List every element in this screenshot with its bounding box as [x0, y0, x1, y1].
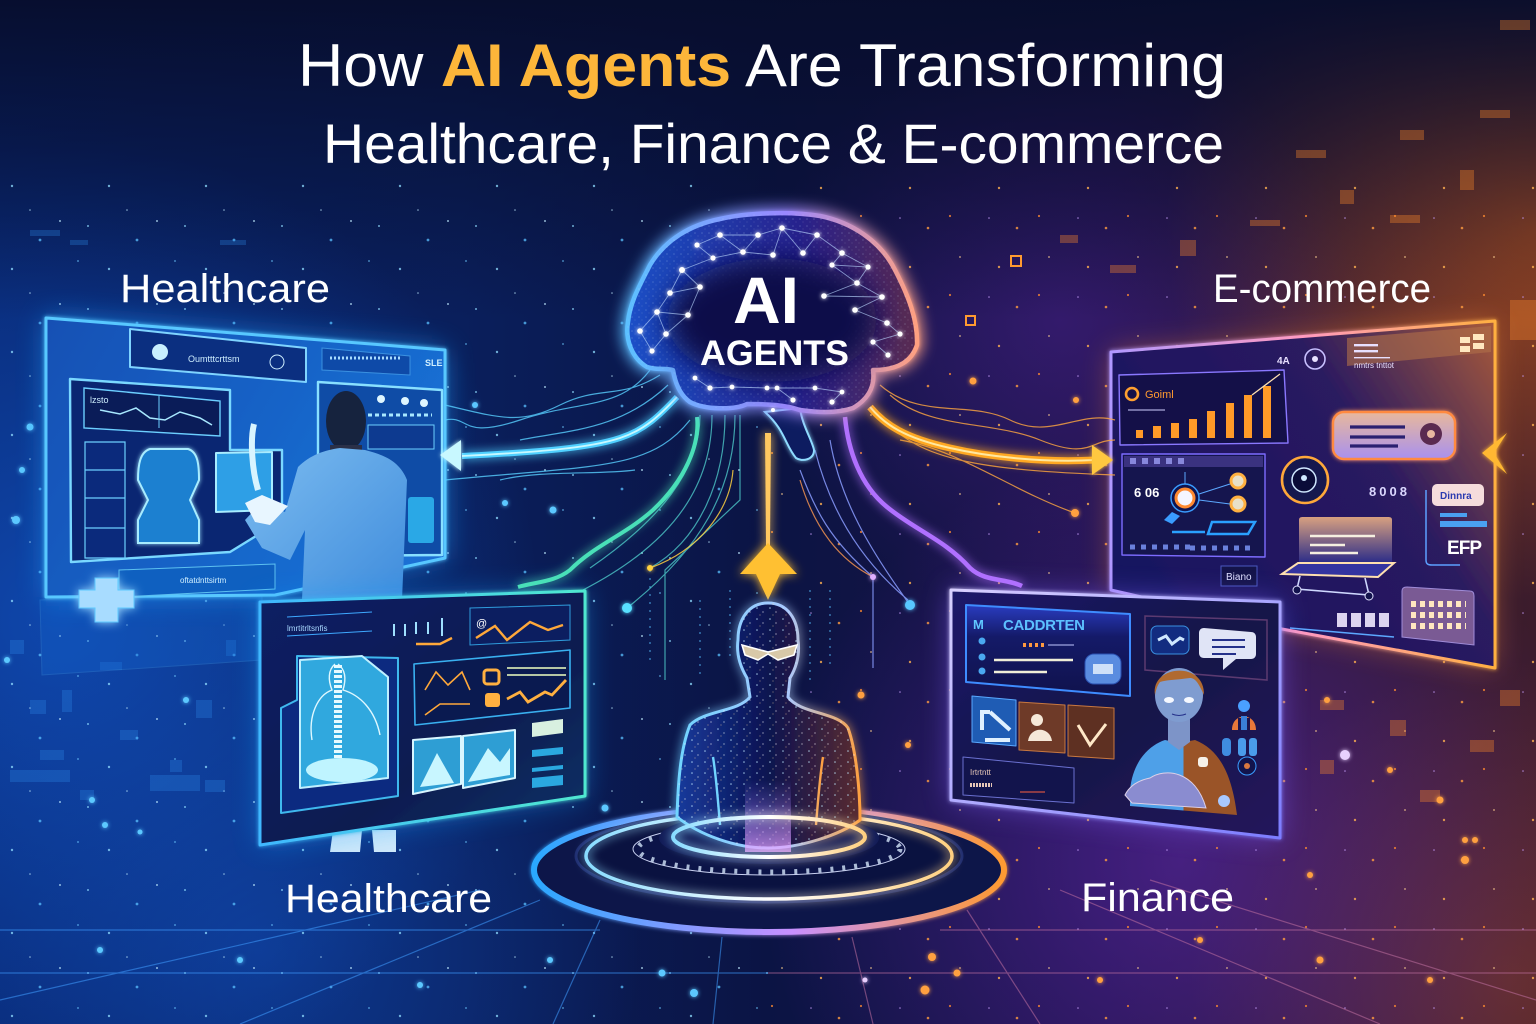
spine scan document [281, 656, 398, 813]
network nodes [637, 225, 903, 412]
title: How AI Agents Are Transforming [298, 32, 1226, 99]
label: healthcare upper: Healthcare [120, 267, 330, 311]
top icons: 4A [1277, 356, 1290, 367]
top icons [1277, 334, 1484, 370]
glowing particles [4, 378, 1478, 997]
title: Healthcare, Finance & E-commerce [323, 112, 1224, 175]
arrow: brain to finance [845, 417, 1022, 586]
header strip: SLE [425, 358, 443, 368]
network box: 6 06 [1134, 485, 1159, 500]
account card: CADDRTEN [1003, 617, 1085, 634]
arrow: brain to lower healthcare [518, 417, 697, 587]
grid box [85, 442, 125, 558]
icon: medical cross [79, 578, 134, 622]
main view box [70, 379, 282, 562]
platform: inner glowing ring [673, 817, 865, 857]
side icons [1222, 700, 1257, 775]
arrow: brain to upper healthcare [440, 397, 677, 471]
top icons: nmtrs tnttot [1354, 361, 1395, 370]
caption [1221, 566, 1257, 586]
bottom bar: oftatdnttsirtm [180, 576, 227, 585]
icon tiles [1402, 587, 1474, 645]
revenue chart: Goiml [1145, 389, 1174, 401]
speech bubble [1199, 628, 1256, 670]
chart box: lzsto [90, 395, 109, 405]
inner arm lines [713, 757, 823, 825]
panel: upper healthcare dashboard [40, 318, 445, 675]
charts box [414, 650, 570, 725]
label: finance: Finance [1081, 876, 1234, 920]
central human figure [677, 603, 860, 852]
header row: @ [476, 618, 487, 630]
search bar [130, 329, 306, 382]
chat card [1333, 412, 1455, 459]
panel: e-commerce dashboard [1111, 321, 1507, 668]
hand-held scan card [216, 452, 272, 512]
list bars [532, 719, 563, 788]
chevron [1482, 433, 1507, 474]
header strip [322, 348, 443, 375]
perspective floor grid [0, 880, 1536, 1024]
assistant avatar [1125, 668, 1237, 815]
badge column: EFP [1447, 538, 1482, 559]
code label: 8008 [1369, 484, 1407, 499]
account card: M [973, 617, 984, 632]
panel: finance dashboard [951, 590, 1280, 838]
image tiles [413, 730, 515, 794]
account card [966, 605, 1130, 696]
central brain with neural network [627, 213, 917, 460]
label: healthcare lower: Healthcare [285, 877, 492, 921]
caption: Biano [1226, 572, 1252, 583]
arrow: brain to e-commerce [870, 407, 1113, 475]
platform [534, 808, 1004, 932]
icon: small orange squares [966, 256, 1021, 325]
title [298, 32, 1226, 175]
light beam [745, 780, 791, 852]
network box [1122, 454, 1265, 557]
chart box [84, 388, 220, 436]
doctor figure [245, 391, 407, 852]
visor [742, 645, 797, 660]
brain label [700, 263, 849, 373]
data table [963, 757, 1074, 803]
data blocks: right [1060, 20, 1536, 802]
brain label: AI [733, 263, 799, 337]
circle icon [1282, 457, 1328, 503]
network lines [640, 228, 900, 402]
tab row [1290, 620, 1394, 637]
brain label: AGENTS [700, 334, 849, 373]
data table: Irtrtntt [970, 768, 992, 777]
bottom bar [119, 564, 275, 597]
thin network strands [445, 370, 1115, 680]
vitals box [318, 382, 442, 556]
header row [287, 605, 570, 645]
node dots [622, 565, 915, 613]
data blocks: left [10, 230, 246, 800]
wave badge [1145, 616, 1267, 680]
header bar [1347, 326, 1491, 366]
laptop cart [1282, 517, 1394, 600]
search bar: Oumtttcrttsm [188, 354, 240, 364]
badge column [1426, 484, 1487, 565]
panel: lower healthcare dashboard [260, 591, 585, 845]
label: e-commerce: E-commerce [1213, 267, 1431, 311]
icon tiles [972, 696, 1114, 759]
badge column: Dinnra [1440, 491, 1472, 502]
revenue chart [1119, 370, 1288, 445]
header row: lmrtitrltsnfis [287, 624, 327, 633]
arrow: brain to person [740, 433, 797, 600]
spine scan [138, 449, 199, 543]
